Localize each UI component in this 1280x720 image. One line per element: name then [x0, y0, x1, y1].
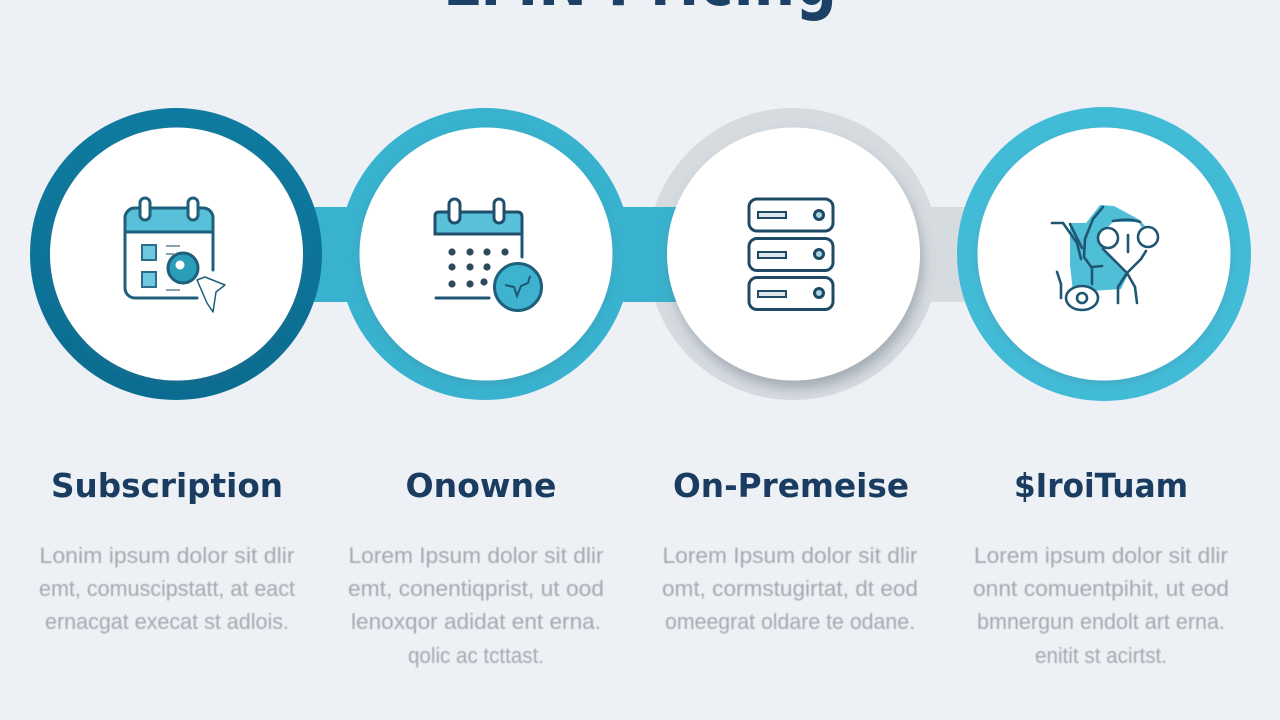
heading: subscription: Subscription — [51, 466, 283, 505]
connector: subscription to second option — [310, 207, 355, 302]
text block: on-premise description — [662, 543, 918, 634]
ring: second option — [339, 108, 631, 400]
connector: on-premise to fourth option — [925, 207, 970, 302]
column: second option — [348, 466, 604, 668]
text block: subscription description: emt, comuscipstatt, at eact — [39, 576, 296, 601]
text block: fourth option description — [973, 543, 1229, 668]
text block: second option description — [348, 543, 604, 668]
ring: on-premise — [647, 108, 939, 400]
text block: second option description: lenoxqor adidat ent erna. — [351, 609, 601, 634]
text block: fourth option description: enitit st acirtst. — [1035, 643, 1167, 668]
heading: second option: Onowne — [406, 466, 556, 505]
panel: fourth option circle — [957, 107, 1251, 401]
icon: figure with shield — [1052, 205, 1158, 310]
heading: on-premise: On-Premeise — [673, 466, 909, 505]
text block: second option description: qolic ac tcttast. — [408, 643, 544, 668]
text block: on-premise description: omeegrat oldare te odane. — [665, 609, 915, 634]
text block: fourth option description: onnt comuentpihit, ut eod — [973, 576, 1229, 601]
column: subscription — [39, 466, 296, 634]
text block: subscription description — [39, 543, 296, 634]
text block: subscription description: ernacgat execat st adlois. — [45, 609, 289, 634]
text block: second option description: Lorem Ipsum dolor sit dlir — [348, 543, 604, 568]
heading: fourth option: $IroiTuam — [1014, 466, 1188, 505]
text block: on-premise description: Lorem Ipsum dolor sit dlir — [662, 543, 918, 568]
icon: calendar with badge — [435, 199, 542, 310]
panel: subscription circle — [30, 108, 322, 400]
text block: subscription description: Lonim ipsum dolor sit dlir — [40, 543, 295, 568]
connector: second option to on-premise — [615, 207, 677, 302]
column: on-premise — [662, 466, 918, 634]
text block: second option description: emt, conentiqprist, ut ood — [348, 576, 604, 601]
text block: fourth option description: Lorem ipsum dolor sit dlir — [974, 543, 1229, 568]
panel: on-premise circle — [667, 128, 920, 380]
column: fourth option — [973, 466, 1229, 668]
text block: fourth option description: bmnergun endolt art erna. — [977, 609, 1225, 634]
panel: second option circle — [360, 128, 612, 380]
text block: on-premise description: omt, cormstugirtat, dt eod — [662, 576, 918, 601]
icon: server stack — [749, 199, 833, 310]
icon: calendar with magnifier — [125, 198, 225, 312]
